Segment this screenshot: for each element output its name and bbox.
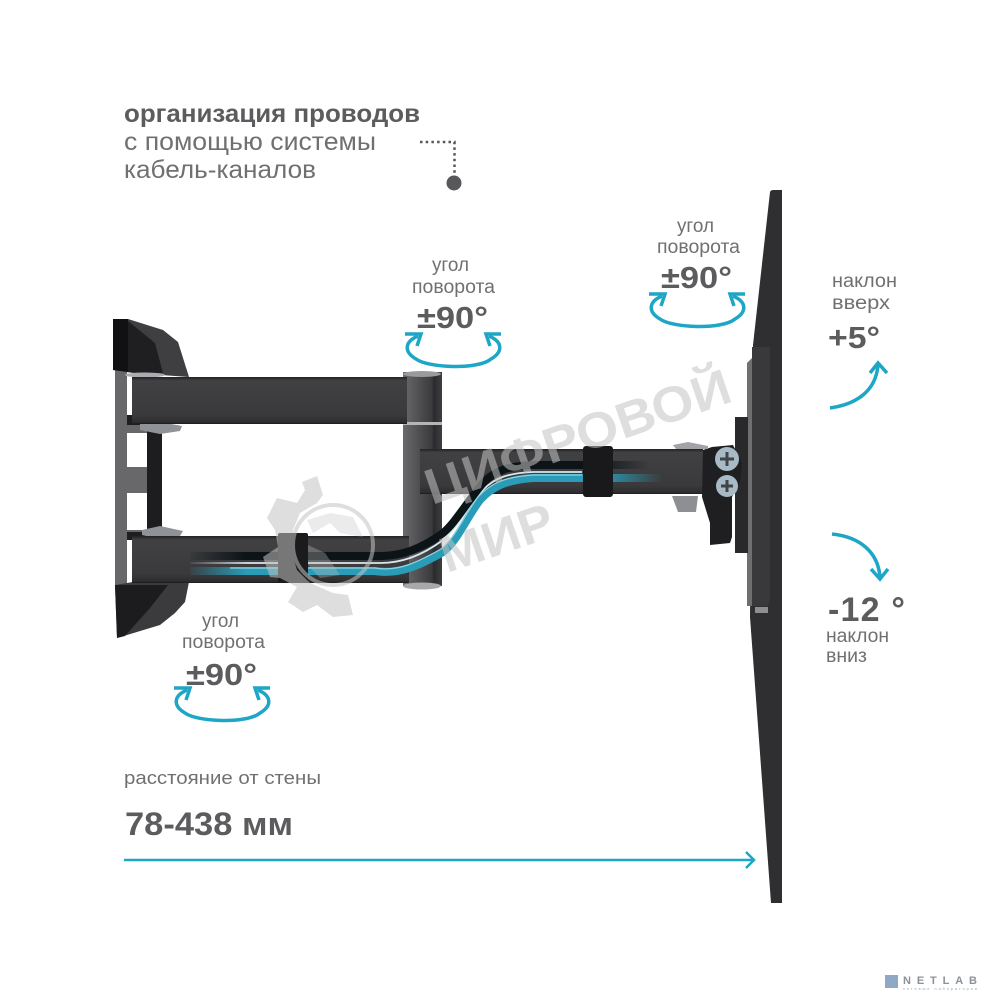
logo: netlab <box>885 975 977 991</box>
label: distance from wall <box>124 768 321 842</box>
screw: bottom <box>716 475 738 497</box>
label: middle rotation <box>412 255 495 335</box>
screw: top <box>715 447 739 471</box>
top wall cover <box>113 319 189 377</box>
label: tilt up <box>828 271 897 355</box>
label: tilt up: +5° <box>828 320 880 355</box>
cable clip: upper <box>583 446 613 497</box>
label: lower rotation: угол <box>202 611 239 632</box>
watermark: МИР <box>432 492 561 583</box>
cables <box>190 465 662 572</box>
arrow: distance <box>124 852 754 868</box>
cable clip: lower <box>278 533 308 583</box>
tilt bracket with screws <box>672 417 748 553</box>
watermark gear <box>263 476 373 617</box>
label: top rotation: поворота <box>657 237 740 258</box>
icon: top rotation arrow <box>649 294 745 327</box>
icon: tilt down arrow <box>832 534 888 579</box>
callout: dotted leader <box>420 142 462 190</box>
watermark <box>263 357 738 617</box>
label: lower rotation <box>182 611 265 692</box>
icon: middle rotation arrow <box>405 334 501 367</box>
label: tilt down: вниз <box>826 646 867 667</box>
label: top rotation <box>657 216 740 295</box>
heading: cable management: с помощью системы <box>124 128 376 156</box>
logo: netlab: сетевые лаборатории <box>903 986 977 991</box>
label: distance from wall: расстояние от стены <box>124 768 321 788</box>
label: tilt up: наклон <box>832 271 897 292</box>
label: middle rotation: угол <box>432 255 469 276</box>
label: lower rotation: ±90° <box>186 657 257 692</box>
lower arm <box>132 536 409 583</box>
logo: netlab: NETLAB <box>903 975 977 987</box>
label: middle rotation: ±90° <box>417 300 488 335</box>
pivot column <box>403 371 442 590</box>
second arm <box>420 449 703 494</box>
heading: cable management: кабель-каналов <box>124 156 316 184</box>
label: tilt up: вверх <box>832 293 891 314</box>
label: tilt down: наклон <box>826 626 889 647</box>
label: lower rotation: поворота <box>182 632 265 653</box>
bottom wall cover <box>115 582 189 638</box>
upper arm <box>132 377 407 424</box>
TV panel <box>747 190 782 903</box>
label: top rotation: ±90° <box>661 260 732 295</box>
icon: tilt up arrow <box>830 363 887 408</box>
bolts <box>140 421 182 434</box>
wall plate <box>115 370 147 590</box>
label: distance from wall: 78-438 мм <box>125 806 293 842</box>
label: tilt down <box>826 591 905 667</box>
wall mount <box>113 319 189 638</box>
label: tilt down: -12 ° <box>828 591 905 629</box>
icon: lower rotation arrow <box>174 688 270 721</box>
label: middle rotation: поворота <box>412 277 495 298</box>
label: top rotation: угол <box>677 216 714 237</box>
watermark text: ЦИФРОВОЙ <box>417 357 738 515</box>
heading: cable management: организация проводов <box>124 100 420 128</box>
heading: cable management <box>124 100 420 184</box>
